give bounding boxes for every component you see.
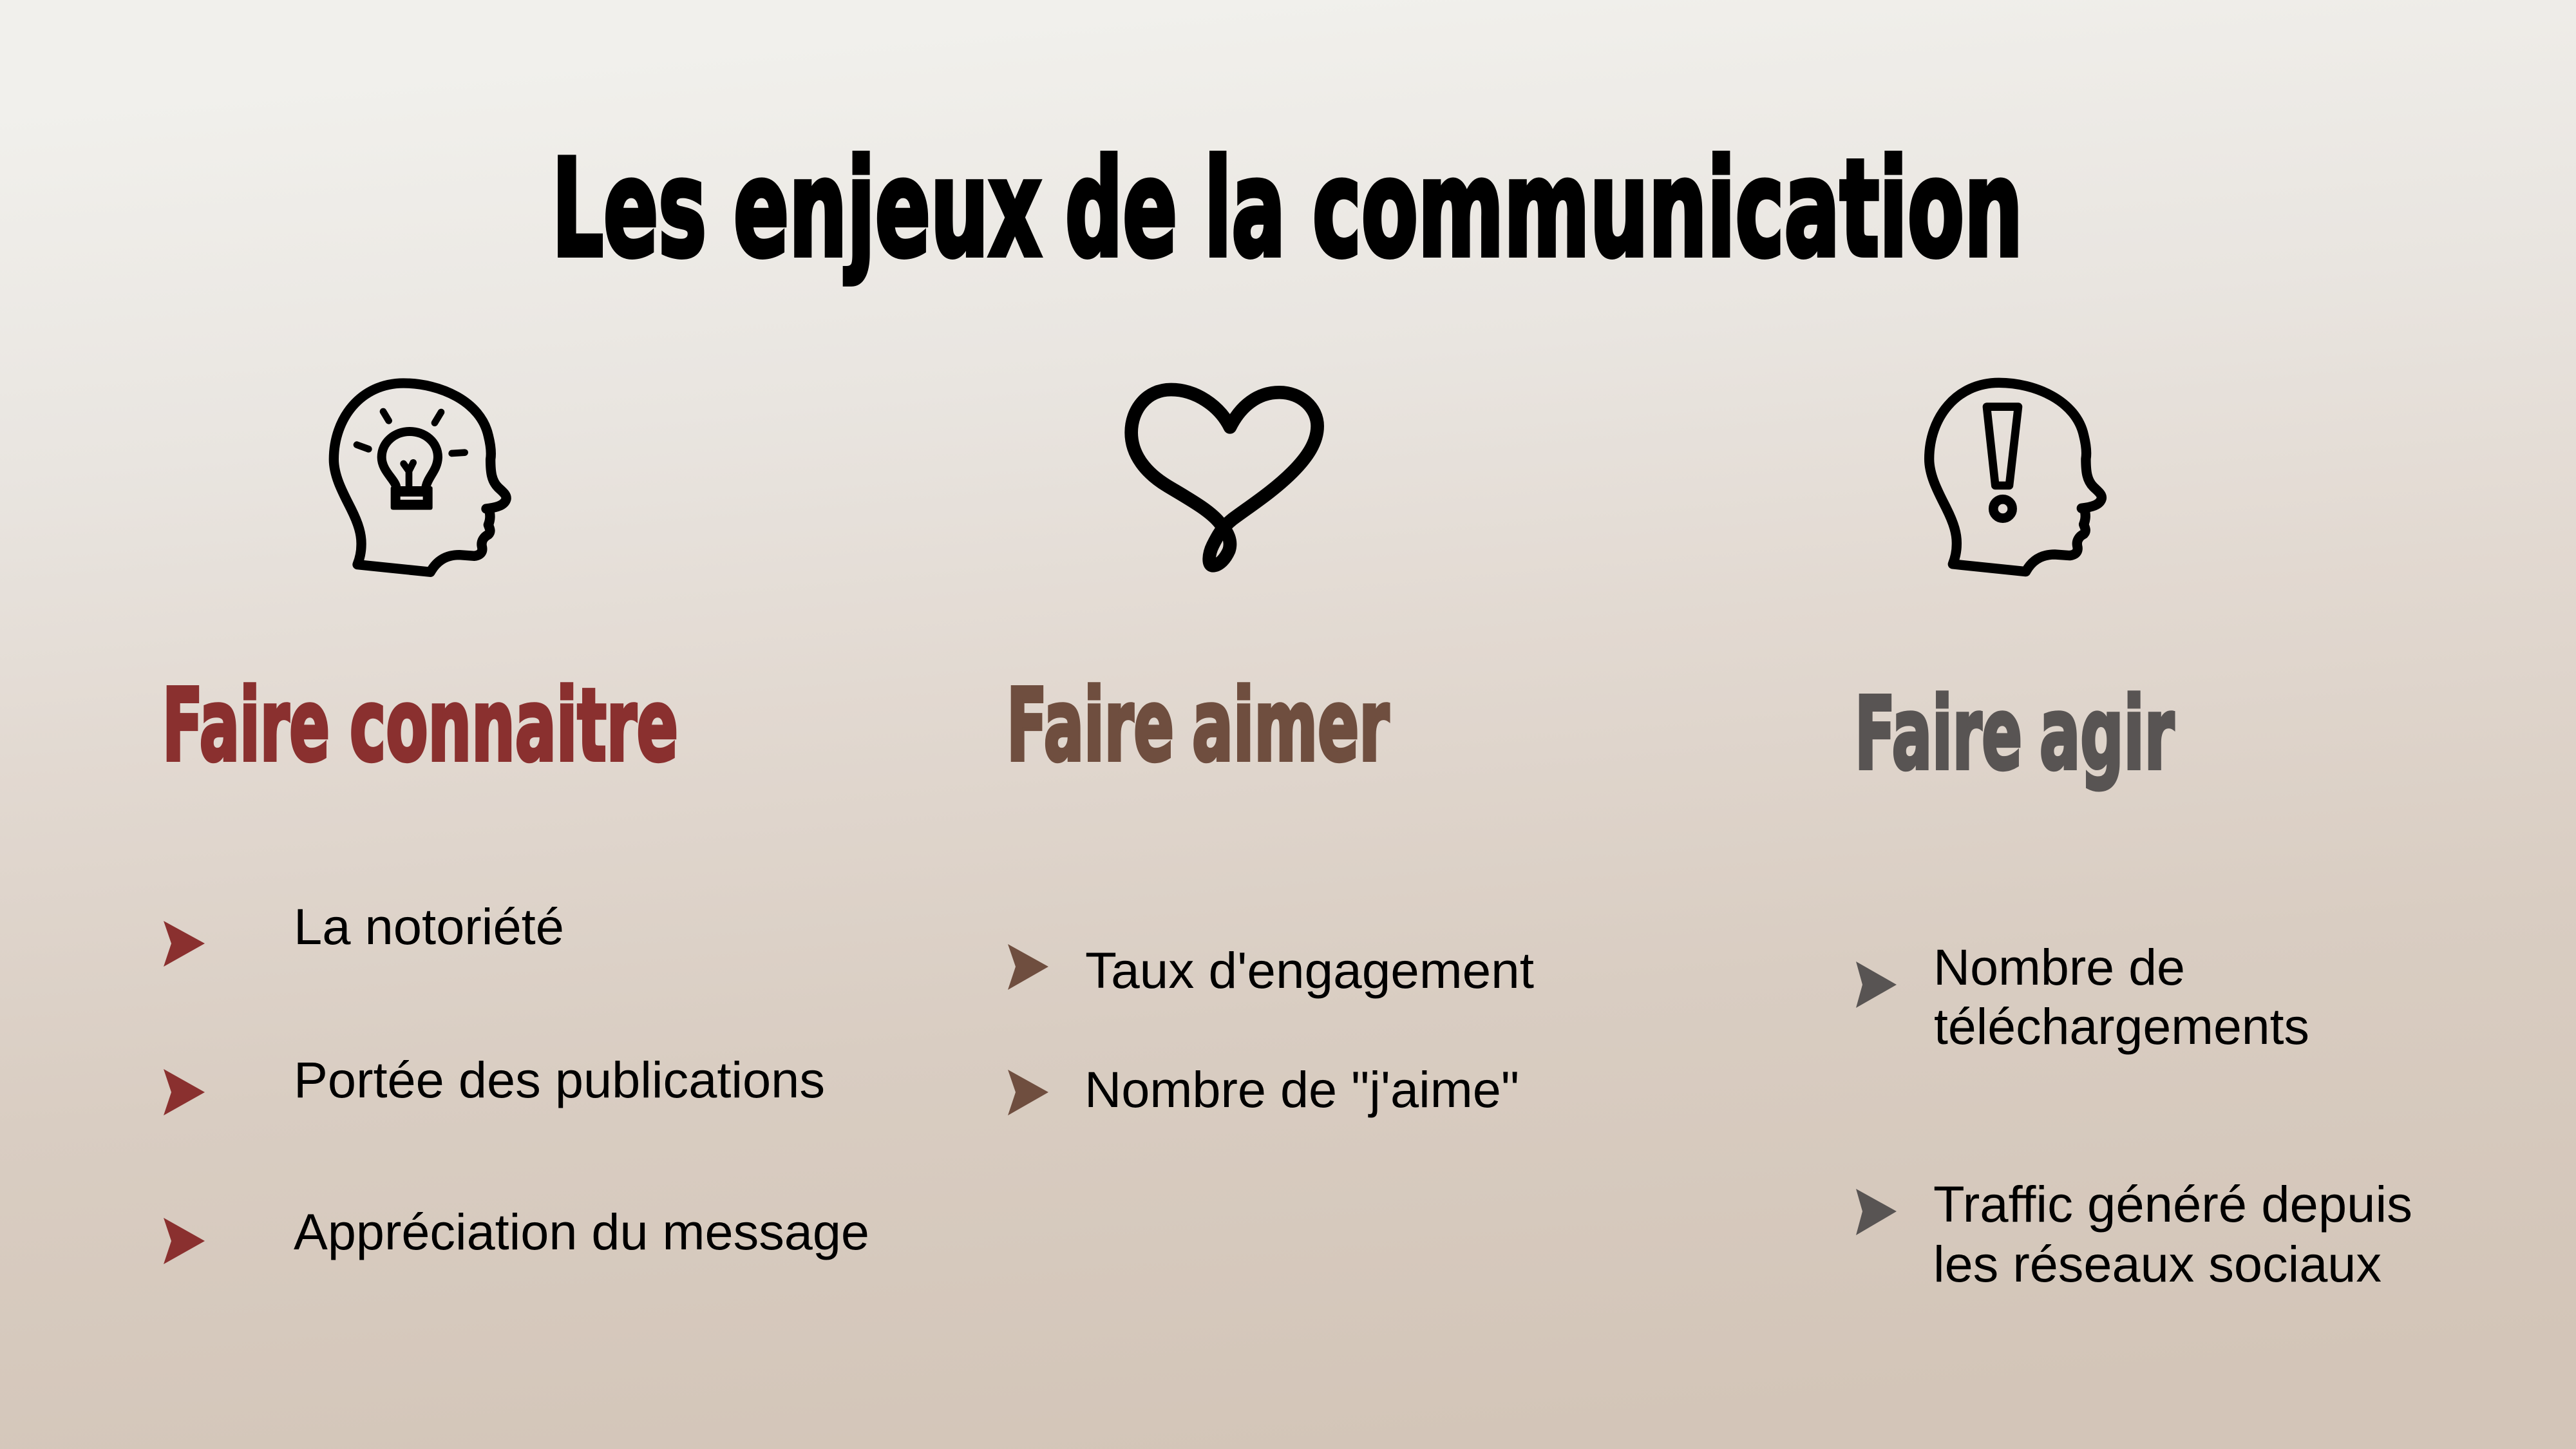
title: Les	[552, 131, 706, 287]
list item: taux d'engagement: Taux d'engagement	[1085, 942, 1534, 999]
list item: nombre de j'aime: Nombre de "j'aime"	[1084, 1061, 1519, 1118]
panel: faire aimer	[1007, 390, 1534, 1118]
list item: traffic genere depuis les reseaux sociaux	[1856, 1175, 2412, 1293]
panel: faire agir	[1855, 383, 2412, 1293]
list item: nombre de telechargements	[1856, 938, 2309, 1055]
title: communication	[1312, 131, 2023, 287]
heading: faire connaitre: Faire	[162, 667, 330, 784]
heading: faire connaitre: connaitre	[350, 667, 678, 784]
icon: head with light bulb	[334, 383, 506, 572]
list item: appreciation du message: Appréciation du message	[294, 1203, 869, 1260]
list item: traffic genere depuis les reseaux sociaux: les réseaux sociaux	[1933, 1235, 2382, 1293]
list item: nombre de telechargements: Nombre de	[1933, 938, 2185, 996]
icon: heart	[1132, 390, 1318, 565]
title: la	[1204, 131, 1285, 287]
heading: faire aimer: aimer	[1192, 667, 1389, 784]
list item: traffic genere depuis les reseaux sociaux: Traffic généré depuis	[1933, 1175, 2412, 1233]
panel: faire connaitre	[162, 383, 869, 1264]
list item: nombre de telechargements: téléchargements	[1934, 998, 2309, 1055]
icon: head with exclamation mark	[1929, 383, 2101, 572]
title: de	[1065, 131, 1177, 287]
heading: faire agir: agir	[2040, 676, 2174, 792]
heading: faire aimer: Faire	[1007, 667, 1174, 784]
list item: la notoriete: La notoriété	[294, 898, 564, 955]
list item: portee des publications: Portée des publications	[294, 1051, 825, 1108]
title: enjeux	[734, 131, 1041, 287]
list item: la notoriete	[164, 898, 564, 967]
heading: faire agir: Faire	[1855, 676, 2022, 792]
